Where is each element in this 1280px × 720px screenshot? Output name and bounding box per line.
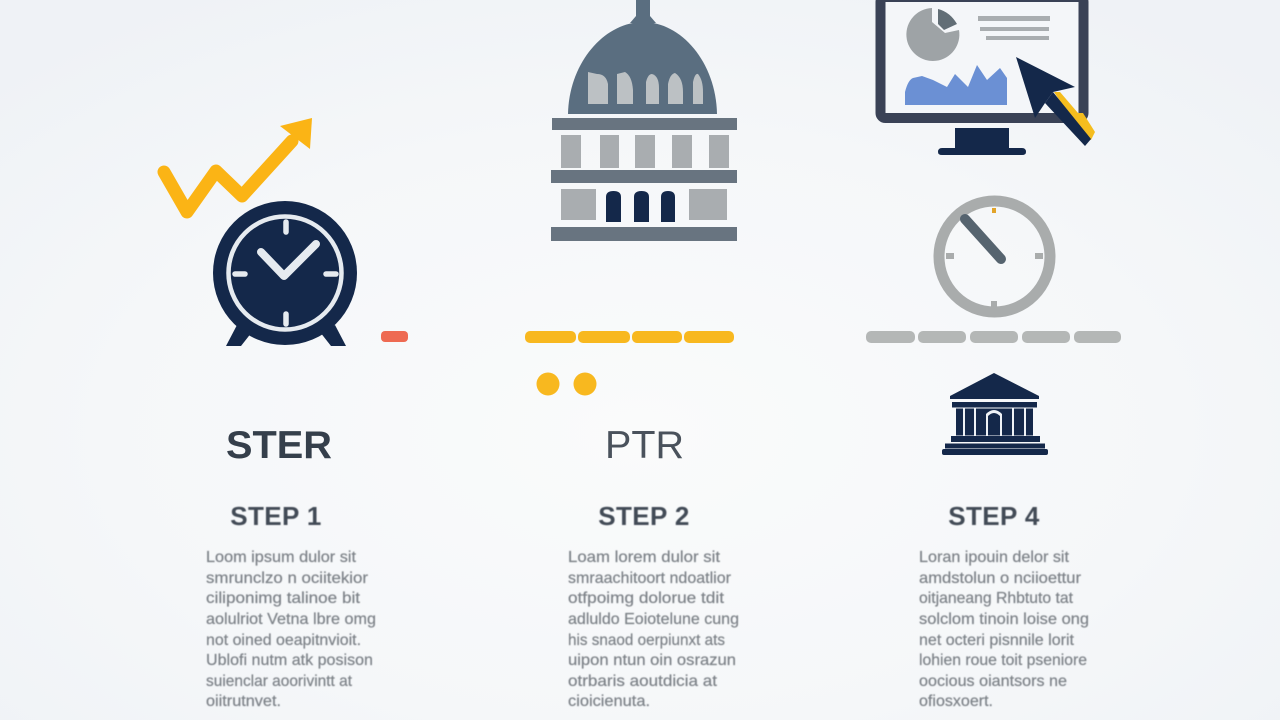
step 1 body text: ciliponimg talinoe bit: [206, 590, 361, 607]
monitor stand: [938, 128, 1026, 155]
step 4 title: STEP 4: [948, 501, 1040, 531]
pie chart: [906, 8, 959, 61]
step 1 body text: aolulriot Vetna lbre omg: [206, 611, 376, 628]
step 2 body text: otrbaris aoutdicia at: [568, 673, 718, 690]
icon: monitor with charts and cursor: [880, 0, 1095, 155]
step 2 body text: [568, 549, 739, 710]
step 2 body text: uipon ntun oin osrazun: [568, 652, 736, 669]
yellow dots: [536, 372, 596, 396]
step 4 body text: oocious oiantsors ne: [919, 673, 1067, 690]
step 1 body text: Loom ipsum dulor sit: [206, 549, 357, 566]
column 1: step 1: [206, 501, 376, 710]
step 1 body text: [206, 549, 376, 710]
red dash: [381, 331, 408, 342]
text lines: [978, 16, 1050, 40]
yellow segmented line: [525, 331, 734, 343]
step 4 body text: amdstolun o nciioettur: [919, 570, 1082, 587]
step 2 title: STEP 2: [598, 501, 690, 531]
icon: capitol building: [551, 0, 737, 241]
step 1 body text: smrunclzo n ociitekior: [206, 570, 369, 587]
step 4 body text: [919, 549, 1089, 710]
step 2 body text: his snaod oerpiunxt ats: [568, 632, 725, 649]
step 2 body text: cioicienuta.: [568, 693, 650, 710]
step 4 body text: oitjaneang Rhbtuto tat: [919, 590, 1074, 607]
step 1 body text: Ublofi nutm atk posison: [206, 652, 373, 669]
grey segmented line: [866, 331, 1121, 343]
cursor: [1016, 57, 1095, 146]
step 1 body text: not oined oeapitnvioit.: [206, 632, 361, 649]
step 4 body text: net octeri pisnnile lorit: [919, 632, 1075, 649]
icon: navy alarm clock: [213, 201, 357, 346]
heading: STER: STER: [226, 424, 332, 467]
area chart: [905, 65, 1007, 105]
step 4 body text: lohien roue toit pseniore: [919, 652, 1087, 669]
step 2 body text: Loam lorem dulor sit: [568, 549, 721, 566]
icon: grey gauge: [939, 201, 1050, 312]
step 4 body text: solclom tinoin loise ong: [919, 611, 1089, 628]
step 1 body text: suienclar aoorivintt at: [206, 673, 353, 690]
step 1 body text: oiitrutnvet.: [206, 693, 281, 710]
icon: navy temple: [942, 373, 1048, 455]
step 2 body text: adluldo Eoiotelune cung: [568, 611, 739, 628]
step 1 title: STEP 1: [230, 501, 322, 531]
icon: rising zigzag arrow: [164, 118, 312, 212]
heading: PTR: PTR: [605, 424, 684, 467]
step 2 body text: smraachitoort ndoatlior: [568, 570, 732, 587]
step 4 body text: Loran ipouin delor sit: [919, 549, 1070, 566]
step 2 body text: otfpoimg dolorue tdit: [568, 590, 725, 607]
step 4 body text: ofiosxoert.: [919, 693, 993, 710]
column 2: step 2: [568, 501, 739, 710]
column 3: step 4: [919, 501, 1089, 710]
